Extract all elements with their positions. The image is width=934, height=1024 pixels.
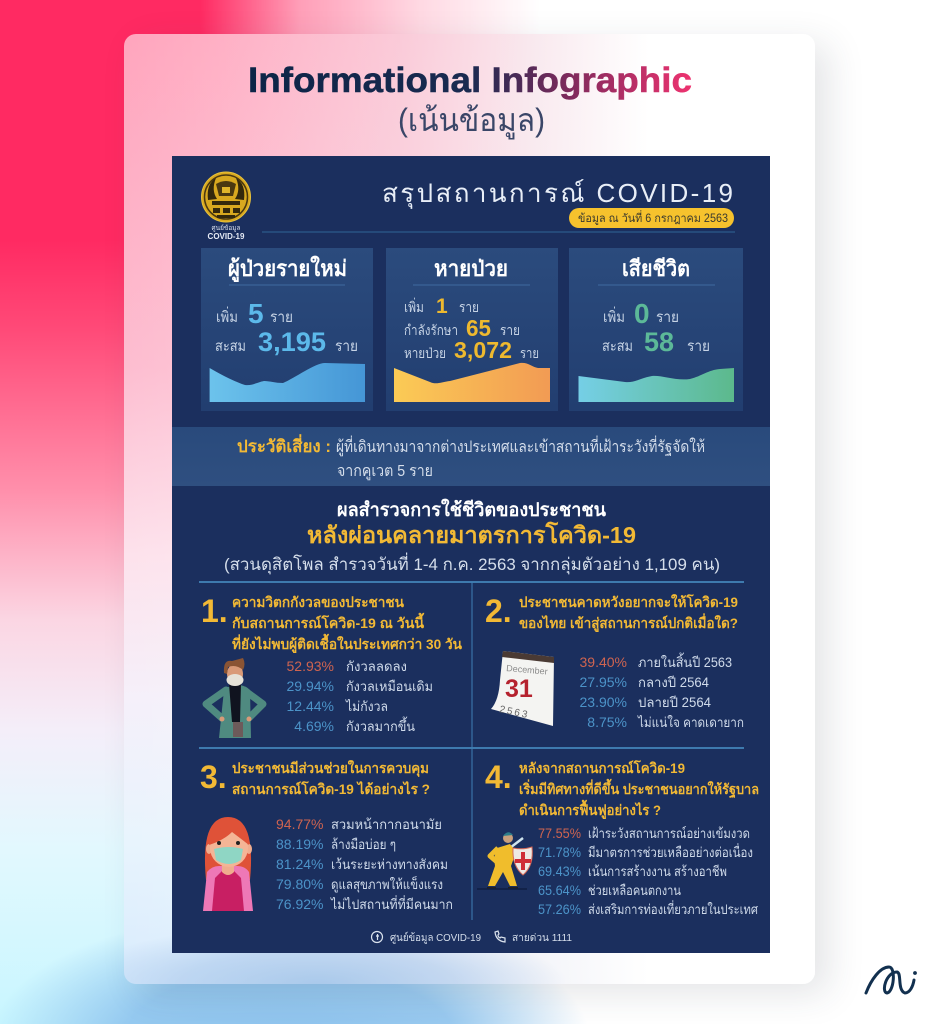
stat: new: เพิ่ม [404, 298, 424, 315]
stat: new: ราย [459, 299, 479, 315]
survey heading: ผลสำรวจการใช้ชีวิตของประชาชน [337, 498, 606, 521]
emblem caption: ศูนย์ข้อมูล [212, 224, 241, 232]
data rows [276, 816, 453, 912]
survey heading: หลังผ่อนคลายมาตรการโควิด-19 [307, 521, 636, 548]
data rows: กังวลลดลง [346, 659, 407, 674]
stat: new: เพิ่ม [216, 306, 238, 326]
data rows: ดูแลสุขภาพให้แข็งแรง [331, 875, 443, 893]
icon: man with mask [206, 658, 263, 738]
data rows: 57.26% [538, 901, 581, 917]
data rows: 79.80% [276, 876, 323, 892]
question 4: เริ่มมีทิศทางที่ดีขึ้น ประชาชนอยากให้รัฐบาล [519, 778, 759, 799]
area chart: recovered [394, 363, 550, 402]
risk history band: ประวัติเสี่ยง : [237, 434, 331, 456]
data rows: 81.24% [276, 856, 323, 872]
page title [248, 61, 692, 140]
risk history band: ผู้ที่เดินทางมาจากต่างประเทศและเข้าสถานที่เฝ้าระวังที่รัฐจัดให้ [336, 435, 705, 457]
number 4: 4. [485, 759, 512, 795]
stat: new [216, 298, 293, 329]
heading: หายป่วย [434, 256, 508, 281]
panel: new patients [201, 248, 373, 411]
data rows: 77.55% [538, 825, 581, 841]
stat: new [404, 295, 479, 318]
section 3: public participation [200, 759, 453, 912]
stat: new: เพิ่ม [603, 306, 625, 326]
question 2: ของไทย เข้าสู่สถานการณ์ปกติเมื่อใด? [519, 613, 738, 632]
survey heading [224, 498, 720, 575]
panel: recovered [386, 248, 558, 411]
data rows: ช่วยเหลือคนตกงาน [588, 883, 681, 898]
data rows: 27.95% [580, 674, 627, 690]
data rows [538, 825, 758, 917]
data rows: เน้นการสร้างงาน สร้างอาชีพ [588, 864, 727, 879]
question 4: หลังจากสถานการณ์โควิด-19 [519, 759, 685, 776]
icon: calendar: 31 [505, 675, 533, 703]
stat: total [215, 327, 358, 357]
data rows: เว้นระยะห่างทางสังคม [331, 857, 448, 872]
question 4: ดำเนินการฟื้นฟูอย่างไร ? [519, 799, 661, 819]
question 4 [519, 759, 759, 819]
area chart: deaths [578, 368, 734, 402]
area chart: new patients [210, 363, 365, 402]
number 1: 1. [201, 593, 228, 629]
emblem caption [208, 224, 245, 241]
question 3: ประชาชนมีส่วนช่วยในการควบคุม [232, 759, 429, 777]
question 3 [232, 759, 430, 797]
icon: woman with mask [203, 817, 253, 911]
data rows: 4.69% [294, 718, 334, 734]
question 1: ที่ยังไม่พบผู้ติดเชื้อในประเทศกว่า 30 วัน [232, 633, 462, 653]
data rows: กังวลเหมือนเดิม [346, 679, 433, 694]
data rows: 29.94% [287, 678, 334, 694]
stat: total: ราย [335, 338, 358, 355]
icon: hero with shield [477, 832, 532, 889]
data rows [580, 652, 744, 730]
stat: recovered total [404, 337, 539, 363]
risk history band: จากคูเวต 5 ราย [337, 463, 433, 481]
stat: total: สะสม [215, 338, 246, 355]
stat: new: 0 [634, 298, 650, 329]
data rows: ส่งเสริมการท่องเที่ยวภายในประเทศ [588, 900, 758, 917]
question 3: สถานการณ์โควิด-19 ได้อย่างไร ? [232, 780, 430, 797]
stat: total: สะสม [602, 338, 633, 355]
icon: calendar: December [506, 663, 548, 677]
stat: new: 1 [436, 295, 448, 318]
poster title: สรุปสถานการณ์ COVID-19 [382, 178, 733, 209]
data rows: ล้างมือบ่อย ๆ [331, 837, 396, 852]
data rows: 88.19% [276, 836, 323, 852]
data rows: 76.92% [276, 896, 323, 912]
data rows: กลางปี 2564 [638, 675, 709, 690]
page title: Informational Infographic [248, 61, 692, 100]
question 2 [519, 593, 738, 632]
data rows: กังวลมากขึ้น [346, 716, 415, 734]
icon: calendar: 2563 [498, 704, 530, 721]
question 1: กับสถานการณ์โควิด-19 ณ วันนี้ [232, 612, 424, 631]
data rows: มีมาตรการช่วยเหลืออย่างต่อเนื่อง [588, 843, 753, 860]
data rows: 69.43% [538, 863, 581, 879]
stat: new: ราย [270, 309, 293, 326]
stat: recovered total: ราย [520, 345, 539, 361]
data rows: ปลายปี 2564 [638, 695, 711, 710]
emblem caption: COVID-19 [208, 232, 245, 241]
stat: total: 58 [644, 327, 674, 357]
footer contacts: ศูนย์ข้อมูล COVID-19 [390, 931, 481, 944]
data rows: 8.75% [587, 714, 627, 730]
stat: recovered total: 3,072 [454, 337, 512, 363]
survey heading: (สวนดุสิตโพล สำรวจวันที่ 1-4 ก.ค. 2563 จากกลุ่มตัวอย่าง 1,109 คน) [224, 552, 720, 575]
data rows: 39.40% [580, 654, 627, 670]
section 1: worry level [201, 593, 462, 738]
date pill [569, 208, 734, 228]
section 4: recovery [477, 759, 759, 917]
stat: in treatment: 65 [466, 315, 491, 341]
icon: phone [495, 931, 505, 942]
data rows [287, 658, 433, 734]
date pill: ข้อมูล ณ วันที่ 6 กรกฎาคม 2563 [578, 210, 728, 225]
data rows: ไม่ไปสถานที่ที่มีคนมาก [330, 895, 453, 912]
stat: in treatment: ราย [500, 322, 520, 338]
risk history band [172, 427, 770, 486]
data rows: เฝ้าระวังสถานการณ์อย่างเข้มงวด [588, 825, 750, 841]
question 1 [232, 594, 462, 653]
heading: เสียชีวิต [622, 256, 690, 281]
subtitle: (เน้นข้อมูล) [398, 102, 545, 140]
number 3: 3. [200, 759, 227, 795]
data rows: 12.44% [287, 698, 334, 714]
question 2: ประชาชนคาดหวังอยากจะให้โควิด-19 [519, 593, 738, 610]
data rows: ไม่กังวล [345, 699, 388, 714]
icon: calendar [491, 651, 554, 726]
data rows: 23.90% [580, 694, 627, 710]
heading: ผู้ป่วยรายใหม่ [228, 255, 347, 283]
stat: in treatment [404, 315, 520, 341]
stat: new [603, 298, 679, 329]
section 2: return to normal [485, 593, 744, 730]
footer contacts [372, 931, 572, 944]
stat: total: ราย [687, 338, 710, 355]
panel: navy poster [172, 156, 770, 953]
data rows: ภายในสิ้นปี 2563 [638, 652, 732, 670]
number 2: 2. [485, 593, 512, 629]
stat: recovered total: หายป่วย [404, 345, 446, 361]
stat: new: ราย [656, 309, 679, 326]
data rows: 65.64% [538, 882, 581, 898]
stat: new: 5 [248, 298, 264, 329]
panel: white frosted card [124, 34, 815, 984]
data rows: 52.93% [287, 658, 334, 674]
data rows: 71.78% [538, 844, 581, 860]
stat: in treatment: กำลังรักษา [404, 322, 458, 338]
icon: facebook [372, 932, 382, 942]
footer contacts: สายด่วน 1111 [512, 932, 572, 944]
stat: total: 3,195 [258, 327, 326, 357]
data rows: 94.77% [276, 816, 323, 832]
panel: deaths [569, 248, 743, 411]
icon: government emblem [202, 172, 250, 241]
stat: total [602, 327, 710, 357]
data rows: สวมหน้ากากอนามัย [331, 817, 442, 832]
data rows: ไม่แน่ใจ คาดเดายาก [637, 714, 744, 730]
question 1: ความวิตกกังวลของประชาชน [232, 594, 404, 610]
icon: brand logo [866, 967, 917, 993]
